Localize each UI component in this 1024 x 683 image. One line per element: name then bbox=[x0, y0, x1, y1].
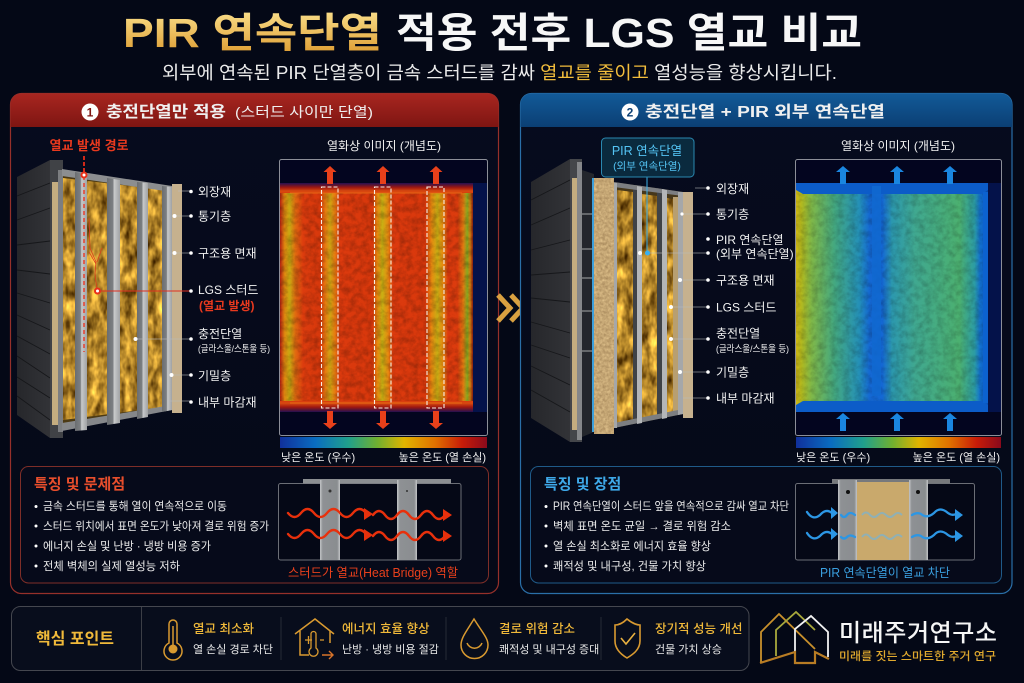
layer labels: before: LGS 스터드 bbox=[198, 283, 258, 297]
layer labels: before: 통기층 bbox=[198, 210, 231, 224]
heat path annotation: 열교 발생 경로 bbox=[50, 138, 129, 153]
title: 적용 전후 LGS 열교 비교 bbox=[396, 10, 862, 56]
panel: before bbox=[10, 94, 498, 594]
features: benefits: 쾌적성 및 내구성, 건물 가치 향상 bbox=[553, 560, 706, 573]
thermal image: after: 열화상 이미지 (개념도) bbox=[841, 139, 955, 153]
features: benefits: 특징 및 장점 bbox=[544, 476, 621, 493]
thermal image: after bbox=[796, 139, 1002, 436]
layer labels: before: (열교 발생) bbox=[199, 298, 254, 313]
features: problems: 에너지 손실 및 난방 · 냉방 비용 증가 bbox=[43, 540, 211, 553]
panel header: before: 충전단열만 적용 bbox=[106, 103, 226, 121]
key point: durability: 건물 가치 상승 bbox=[655, 643, 722, 656]
layer labels: before: 기밀층 bbox=[198, 369, 231, 383]
layer labels: after: 내부 마감재 bbox=[716, 392, 775, 406]
features: benefits: 열 손실 최소화로 에너지 효율 향상 bbox=[553, 540, 711, 553]
layer labels: after: 구조용 면재 bbox=[716, 274, 775, 288]
layer labels: after: 기밀층 bbox=[716, 366, 749, 380]
layer labels: after: 외장재 bbox=[716, 182, 749, 196]
layer labels: before: 충전단열 bbox=[198, 327, 242, 341]
panel header: after: 충전단열 + PIR 외부 연속단열 bbox=[645, 103, 885, 121]
title bbox=[123, 10, 862, 56]
features: problems: 금속 스터드를 통해 열이 연속적으로 이동 bbox=[43, 500, 227, 513]
callout: PIR bbox=[602, 138, 694, 256]
subtitle: 외부에 연속된 PIR 단열층이 금속 스터드를 감싸 열교를 줄이고 열성능을 향상시킵니다. bbox=[162, 63, 837, 83]
layer labels: before bbox=[134, 185, 270, 410]
layer labels: before: 외장재 bbox=[198, 185, 231, 199]
logo: 미래주거연구소 bbox=[839, 620, 997, 647]
thermal image: before: 열화상 이미지 (개념도) bbox=[327, 139, 441, 153]
title: PIR 연속단열 bbox=[123, 10, 382, 56]
panel header: before: (스터드 사이만 단열) bbox=[235, 104, 373, 120]
thermal image: before bbox=[280, 139, 488, 436]
color scale: before bbox=[280, 437, 487, 464]
key point: thermal bridge bbox=[164, 620, 273, 660]
features: problems: 특징 및 문제점 bbox=[34, 476, 125, 493]
key point: condensation: 쾌적성 및 내구성 증대 bbox=[499, 643, 599, 656]
layer labels: after: 통기층 bbox=[716, 208, 749, 222]
callout: PIR: PIR 연속단열 bbox=[612, 144, 682, 158]
key point: durability bbox=[615, 619, 742, 658]
arrow: before to after bbox=[498, 295, 523, 321]
key point: condensation: 결로 위험 감소 bbox=[499, 621, 575, 636]
key point: energy: 에너지 효율 향상 bbox=[342, 622, 430, 636]
wall illustration: before bbox=[17, 160, 182, 438]
heat bridge diagram bbox=[278, 479, 461, 580]
layer labels: before: 구조용 면재 bbox=[198, 246, 257, 260]
color scale: after: 낮은 온도 (우수) bbox=[796, 451, 870, 464]
logo bbox=[760, 612, 997, 663]
layer labels: after: (외부 연속단열) bbox=[716, 247, 794, 261]
key point: thermal bridge: 열교 최소화 bbox=[193, 622, 254, 636]
features: benefits: 벽체 표면 온도 균일 → 결로 위험 감소 bbox=[553, 519, 731, 533]
features: benefits: PIR 연속단열이 스터드 앞을 연속적으로 감싸 열교 차단 bbox=[553, 500, 789, 513]
features: problems: 전체 벽체의 실제 열성능 저하 bbox=[43, 559, 180, 573]
key point heading: 핵심 포인트 bbox=[36, 629, 114, 648]
logo: 미래를 짓는 스마트한 주거 연구 bbox=[839, 650, 996, 663]
layer labels: after bbox=[650, 182, 794, 406]
heat path annotation bbox=[50, 138, 190, 352]
key point: energy: 난방 · 냉방 비용 절감 bbox=[342, 643, 439, 656]
panel header: before: 1 bbox=[87, 106, 94, 120]
panel: after bbox=[520, 94, 1012, 594]
key point: condensation bbox=[461, 619, 599, 658]
wall illustration: after bbox=[531, 159, 693, 442]
callout: PIR: (외부 연속단열) bbox=[613, 160, 681, 172]
layer labels: before: (글라스울/스톤울 등) bbox=[198, 344, 270, 355]
color scale: before: 높은 온도 (열 손실) bbox=[399, 451, 486, 464]
key point: durability: 장기적 성능 개선 bbox=[655, 622, 742, 636]
panel header: after: 2 bbox=[627, 106, 634, 120]
color scale: before: 낮은 온도 (우수) bbox=[281, 451, 355, 464]
layer labels: after: 충전단열 bbox=[716, 326, 760, 340]
layer labels: before: 내부 마감재 bbox=[198, 396, 257, 410]
heat bridge diagram: 스터드가 열교(Heat Bridge) 역할 bbox=[288, 566, 458, 580]
key points bar bbox=[12, 606, 749, 670]
features: benefits bbox=[530, 466, 1002, 583]
color scale: after bbox=[796, 437, 1001, 464]
key point: thermal bridge: 열 손실 경로 차단 bbox=[193, 643, 273, 656]
blocked heat diagram bbox=[796, 479, 974, 580]
panel header: before bbox=[10, 94, 498, 127]
color scale: after: 높은 온도 (열 손실) bbox=[913, 451, 1000, 464]
panel header: after bbox=[520, 94, 1012, 127]
features: problems: 스터드 위치에서 표면 온도가 낮아져 결로 위험 증가 bbox=[43, 520, 269, 533]
layer labels: after: LGS 스터드 bbox=[716, 300, 776, 314]
key point: energy bbox=[295, 619, 439, 659]
layer labels: after: PIR 연속단열 bbox=[716, 233, 784, 247]
features: problems bbox=[20, 466, 488, 583]
blocked heat diagram: PIR 연속단열이 열교 차단 bbox=[820, 566, 950, 580]
layer labels: after: (글라스울/스톤울 등) bbox=[716, 344, 789, 355]
